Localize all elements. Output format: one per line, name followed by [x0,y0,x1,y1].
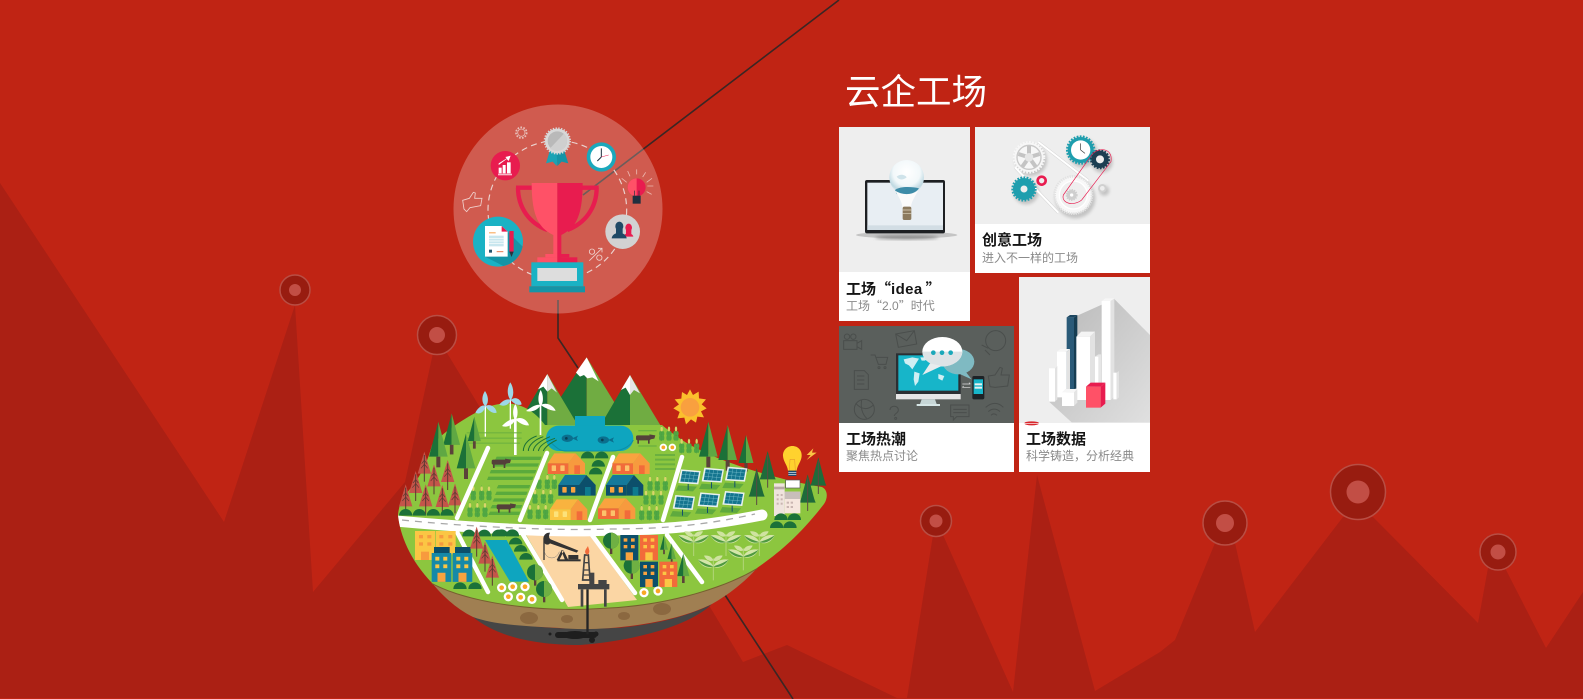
card creative subtitle: 进入不一样的工场 [982,250,1078,265]
sprouts [678,531,775,580]
lower buildings and oil field [495,529,689,634]
panel: card data [1019,277,1150,472]
icon: trophy [516,183,599,292]
wind turbines [475,382,556,455]
icon: medal [545,129,570,166]
icon: light bulb [622,169,653,204]
icon: people [605,214,640,249]
icon: monitor, speech bubble and phone [844,331,1009,420]
panel: card creative factory [975,127,1150,273]
illustrated leaf island [385,357,827,645]
card hot topics subtitle: 聚焦热点讨论 [846,449,918,463]
icon: contract document [473,217,523,267]
icon: percent [589,248,602,261]
icon: growth chart [491,151,520,180]
city block [774,480,800,516]
left forest [399,413,481,516]
village houses [548,452,650,520]
icon: laptop with globe bulb [856,160,957,239]
lower-left district [415,527,552,604]
lower sand plot [525,533,637,607]
card hot topics title: 工场热潮 [846,431,906,448]
icon: idea bulb [783,446,802,476]
mountains and lake [517,357,662,427]
icon: sun [673,389,707,424]
card idea title: 工场“idea” [846,278,941,299]
card data title: 工场数据 [1026,430,1086,448]
mountain marker dots [280,275,1516,570]
icon: thumbs up [463,192,482,212]
icon: gear [516,127,527,138]
panel: card hot topics [839,326,1014,472]
icon: 3D bar chart [1019,298,1150,425]
heading: 云企工场 [845,64,987,115]
card creative title: 创意工场 [982,231,1042,249]
soil layers [432,568,757,645]
icon: oil pump [543,533,581,561]
hill crops and fields [463,432,557,519]
reeds [523,436,557,451]
right side: farm, solar panels, trees, city [636,422,826,580]
background mountains [0,183,1583,698]
card data subtitle: 科学铸造，分析经典 [1026,448,1134,463]
trophy circle [454,104,662,314]
connector lines [558,0,839,699]
card idea subtitle: 工场“2.0”时代 [846,297,935,314]
lake and sun details [475,382,707,455]
icon: oil rig [578,546,609,634]
icon: clock [587,142,616,172]
panel: card idea [839,127,970,321]
green ground [398,403,827,609]
roads [385,448,762,600]
icon: gears [1013,137,1113,218]
icon: lightning [807,448,817,460]
